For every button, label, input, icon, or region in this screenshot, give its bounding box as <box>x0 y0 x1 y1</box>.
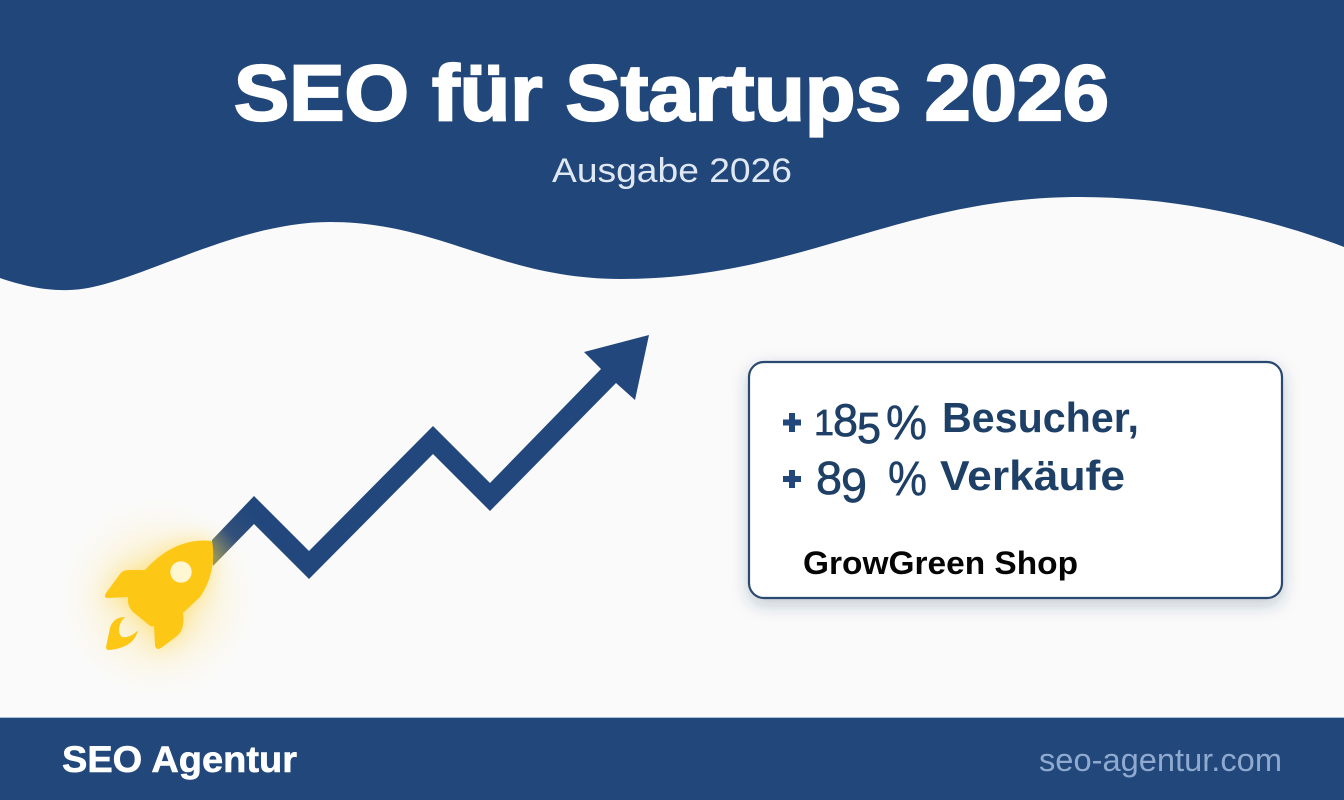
footer brand: SEO Agentur <box>62 739 297 780</box>
panel: results card <box>749 362 1282 598</box>
stat: visitors <box>783 394 1139 453</box>
card box <box>749 362 1282 598</box>
growth arrow <box>212 335 649 579</box>
percent sign: % <box>886 397 927 450</box>
rocket body <box>105 541 213 649</box>
plus sign <box>783 413 801 432</box>
header wave banner <box>0 0 1344 290</box>
title: SEO für Startups 2026 <box>234 48 1109 137</box>
percent sign: % <box>888 453 927 506</box>
rocket window <box>170 561 192 583</box>
number 89 <box>816 452 867 513</box>
word Verkäufe: Verkäufe <box>940 452 1125 499</box>
rocket glow <box>105 541 212 649</box>
number 89: 9 <box>841 460 867 513</box>
number 185 <box>814 395 881 453</box>
icon: rocket <box>58 498 258 698</box>
stat: sales <box>783 452 1125 513</box>
number 185: 5 <box>857 404 881 453</box>
word Besucher: Besucher, <box>942 394 1139 441</box>
number 185: 8 <box>833 395 858 446</box>
number 185: 1 <box>814 402 834 443</box>
plus sign <box>783 470 801 488</box>
subtitle: Ausgabe 2026 <box>552 152 792 190</box>
case study name: GrowGreen Shop <box>803 545 1078 581</box>
rocket flame <box>106 617 138 650</box>
rocket halo <box>58 498 258 698</box>
footer url: seo-agentur.com <box>1039 742 1282 778</box>
footer bar <box>0 717 1344 800</box>
number 89: 8 <box>816 452 842 504</box>
